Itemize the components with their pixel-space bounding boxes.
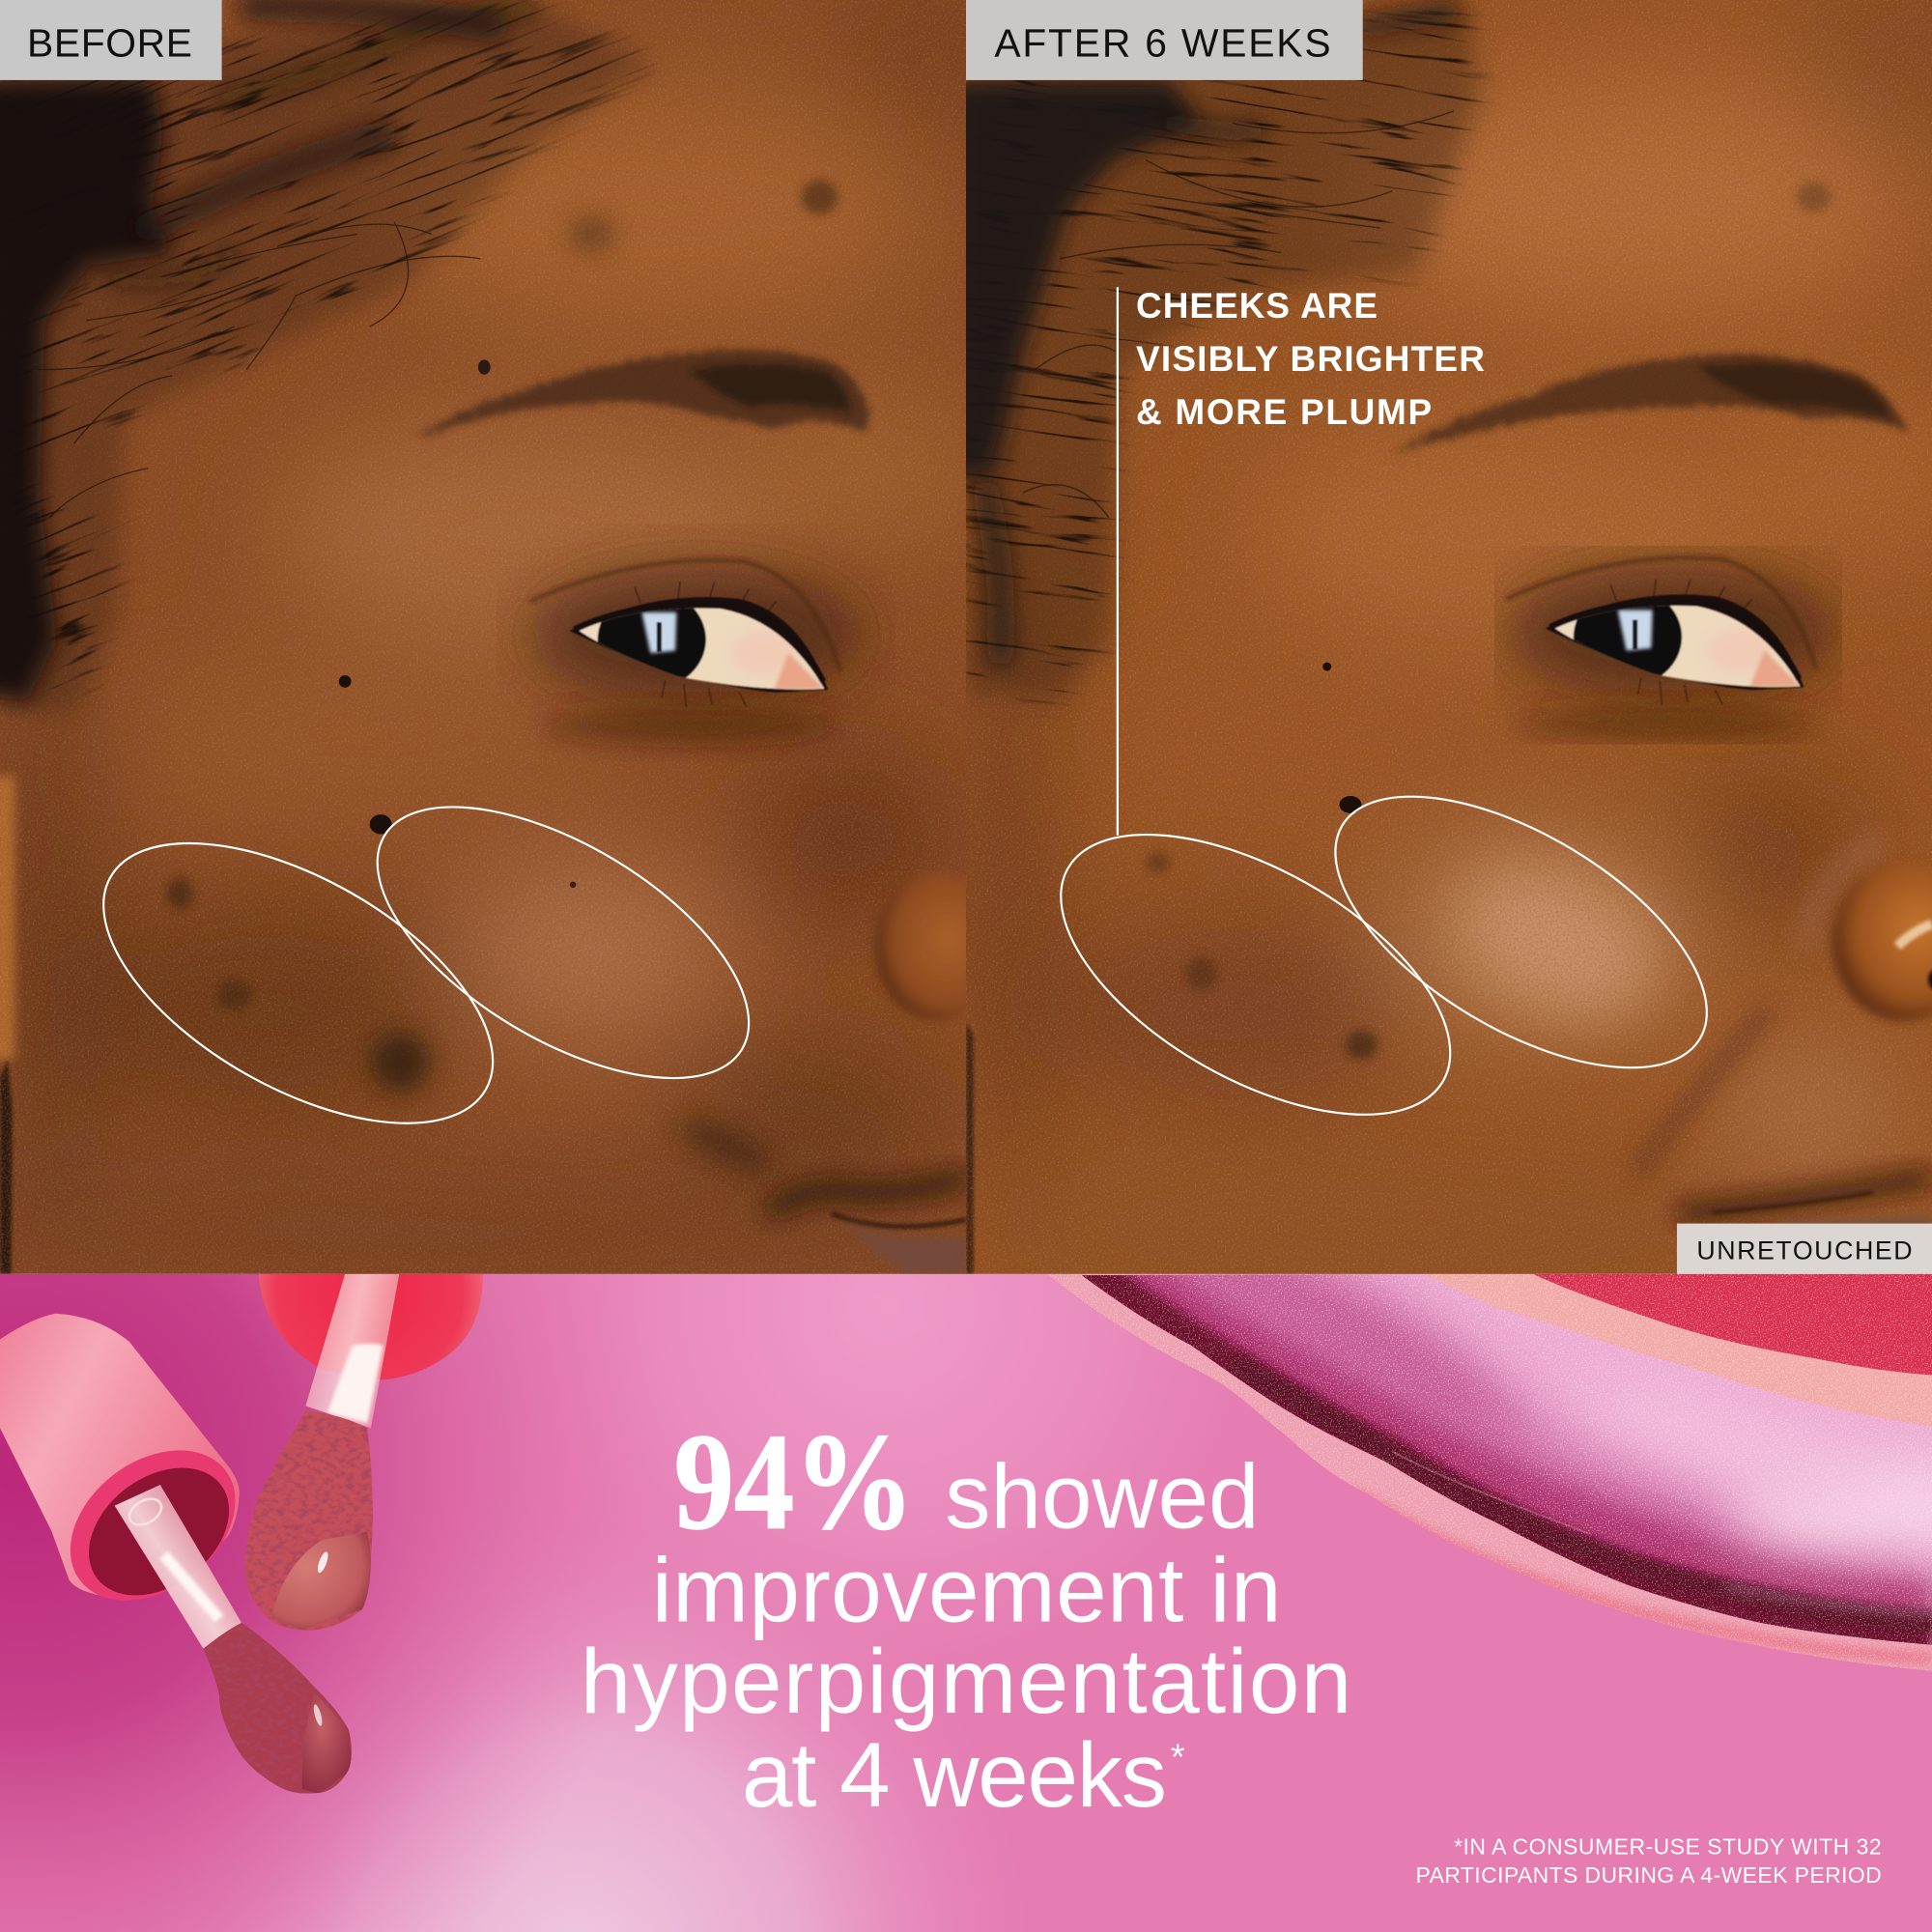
ellipse callouts bbox=[1016, 742, 1749, 1172]
label: after 6 weeks: AFTER 6 WEEKS bbox=[994, 21, 1331, 66]
callout: cheeks text: CHEEKS ARE bbox=[1136, 286, 1378, 326]
icon: red cup and upper applicator bbox=[234, 1274, 483, 1638]
dark spots bbox=[1146, 183, 1831, 1060]
callout leader line bbox=[1117, 287, 1119, 836]
label: unretouched: UNRETOUCHED bbox=[1696, 1236, 1913, 1265]
hair bbox=[519, 0, 1932, 1187]
gloss sparkle bbox=[1035, 1274, 1932, 1681]
skin tone shading bbox=[0, 0, 966, 1274]
headline: showed bbox=[945, 1447, 1260, 1548]
panel: before photo bbox=[0, 0, 966, 1274]
footnote: *IN A CONSUMER-USE STUDY WITH 32 bbox=[1454, 1834, 1882, 1860]
jaw edge bbox=[966, 1023, 974, 1274]
label: before bbox=[0, 0, 222, 80]
callout: cheeks text: VISIBLY BRIGHTER bbox=[1136, 339, 1485, 379]
headline: 94% bbox=[674, 1406, 914, 1558]
headline: improvement in bbox=[652, 1541, 1282, 1642]
skin tone shading bbox=[961, 0, 1932, 1282]
callout: cheeks text: & MORE PLUMP bbox=[1136, 392, 1432, 432]
cheek highlight bbox=[1435, 837, 1682, 1048]
eyebrow bbox=[1392, 354, 1907, 453]
lit ear edge bbox=[0, 777, 14, 1274]
eyebrow bbox=[415, 350, 869, 438]
eye bbox=[529, 560, 863, 743]
gloss upper rim bbox=[1423, 1274, 1932, 1427]
callout: cheeks text bbox=[1136, 286, 1485, 432]
gloss red centre bbox=[1533, 1274, 1932, 1375]
skin base bbox=[966, 0, 1932, 1274]
skin texture bbox=[0, 129, 955, 1274]
background gradient bbox=[0, 1274, 1932, 1932]
label: unretouched bbox=[1677, 1224, 1932, 1274]
headline bbox=[581, 1406, 1351, 1827]
footnote bbox=[1416, 1834, 1882, 1888]
background shading bbox=[0, 1274, 1355, 1932]
dark spots bbox=[166, 180, 838, 1183]
headline: * bbox=[1171, 1737, 1185, 1778]
headline: hyperpigmentation bbox=[581, 1632, 1351, 1733]
headline: at 4 weeks bbox=[742, 1725, 1167, 1827]
nasolabial fold bbox=[1635, 1008, 1771, 1176]
panel: after photo bbox=[519, 0, 1932, 1282]
skin base bbox=[0, 0, 966, 1274]
footnote: PARTICIPANTS DURING A 4-WEEK PERIOD bbox=[1416, 1862, 1882, 1888]
skin texture bbox=[966, 0, 1932, 1274]
lip gloss swoosh bbox=[1035, 1177, 1932, 1681]
gloss coral rim shade bbox=[1355, 1493, 1932, 1659]
nose bbox=[875, 872, 998, 1020]
label: before: BEFORE bbox=[27, 21, 192, 66]
lips bbox=[770, 1177, 966, 1274]
gloss outer rim bbox=[1035, 1274, 1932, 1681]
gloss body bbox=[1060, 1177, 1932, 1681]
eye bbox=[1506, 557, 1838, 741]
ellipse callouts bbox=[59, 753, 792, 1180]
panel: pink product area bbox=[0, 1177, 1932, 1932]
hair bbox=[0, 0, 659, 719]
icon: pink cap and lower applicator bbox=[0, 1314, 357, 1799]
nose bbox=[1805, 840, 1932, 1021]
label: after 6 weeks bbox=[966, 0, 1363, 80]
lips bbox=[1678, 1177, 1932, 1274]
